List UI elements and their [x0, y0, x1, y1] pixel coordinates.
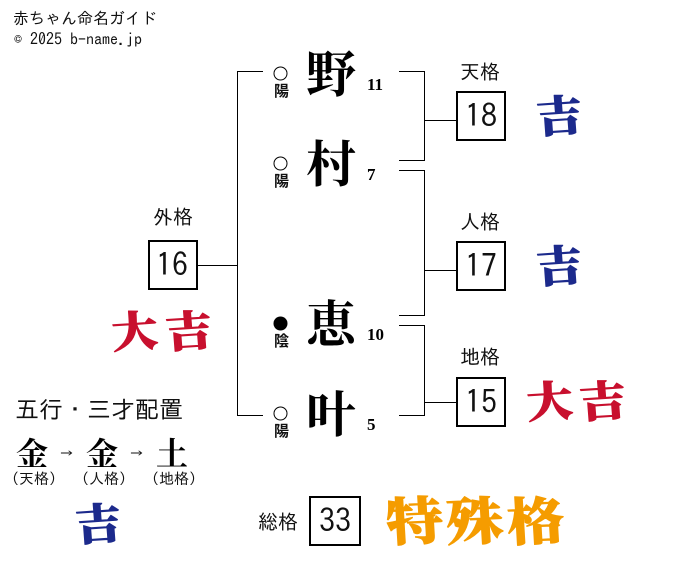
天格 score: 18	[465, 99, 497, 131]
rating: 特殊格: 殊	[444, 480, 505, 556]
name character: 野	[274, 35, 383, 107]
人格 score	[457, 212, 505, 290]
name character: 恵: 10	[367, 325, 384, 344]
five elements: 人格: 金	[86, 429, 118, 475]
five elements: 人格	[74, 429, 134, 486]
site title: 赤ちゃん命名ガイド	[13, 10, 157, 26]
name character: 野: 11	[367, 75, 383, 94]
rating: 外格 大吉	[109, 296, 214, 360]
rating: 外格 大吉: 吉	[163, 296, 214, 360]
rating: 天格 吉: 吉	[534, 80, 584, 146]
connector brackets	[198, 72, 457, 416]
five elements: 天格: 金	[16, 429, 48, 475]
arrow: →	[60, 447, 73, 460]
name character: 叶: 5	[367, 415, 376, 434]
name character: 野: 陽	[274, 80, 289, 101]
name character: 叶: 叶	[306, 375, 356, 447]
rating: 五行 吉: 吉	[73, 488, 123, 554]
rating: 特殊格	[384, 480, 566, 556]
外格 score: 外格	[153, 207, 193, 227]
name character: 村: 陽	[274, 170, 289, 191]
five elements: 地格	[144, 429, 204, 486]
外格 score: 16	[156, 248, 188, 280]
name character: 恵	[274, 285, 384, 357]
name character: 叶	[274, 375, 376, 447]
人格 score: 人格	[460, 212, 500, 232]
five elements: 天格	[4, 429, 64, 486]
総格 score: 33	[319, 504, 351, 536]
name character: 村: 村	[306, 125, 356, 197]
人格 score: 17	[465, 249, 497, 281]
地格 score: 15	[465, 385, 497, 417]
name character: 村: 7	[367, 165, 376, 184]
name character: 恵: 恵	[306, 285, 360, 357]
rating: 地格 大吉: 大	[524, 366, 575, 430]
five elements: 天格: （天格）	[4, 471, 64, 486]
rating: 特殊格: 格	[505, 480, 566, 556]
rating: 地格 大吉: 吉	[577, 366, 628, 430]
天格 score	[457, 62, 505, 140]
name character: 恵: 陰	[274, 330, 289, 351]
arrow: →	[130, 447, 143, 460]
five elements heading: 五行・三才配置	[15, 397, 183, 421]
rating: 特殊格: 特	[384, 480, 445, 556]
rating: 人格 吉: 吉	[534, 230, 584, 296]
copyright: © 2025 b-name.jp	[14, 31, 142, 47]
name character: 村	[274, 125, 376, 197]
rating: 地格 大吉	[524, 366, 628, 430]
地格 score	[457, 347, 505, 426]
天格 score: 天格	[460, 62, 500, 82]
総格 score: 総格	[258, 511, 298, 532]
name character: 野: 野	[306, 35, 356, 107]
five elements: 人格: （人格）	[74, 471, 134, 486]
rating: 外格 大吉: 大	[109, 296, 160, 360]
総格 score	[258, 497, 360, 545]
five elements: 地格: 土	[156, 429, 188, 475]
地格 score: 地格	[460, 347, 500, 367]
five elements: 地格: （地格）	[144, 471, 204, 486]
外格 score	[149, 207, 197, 289]
name character: 叶: 陽	[274, 420, 289, 441]
